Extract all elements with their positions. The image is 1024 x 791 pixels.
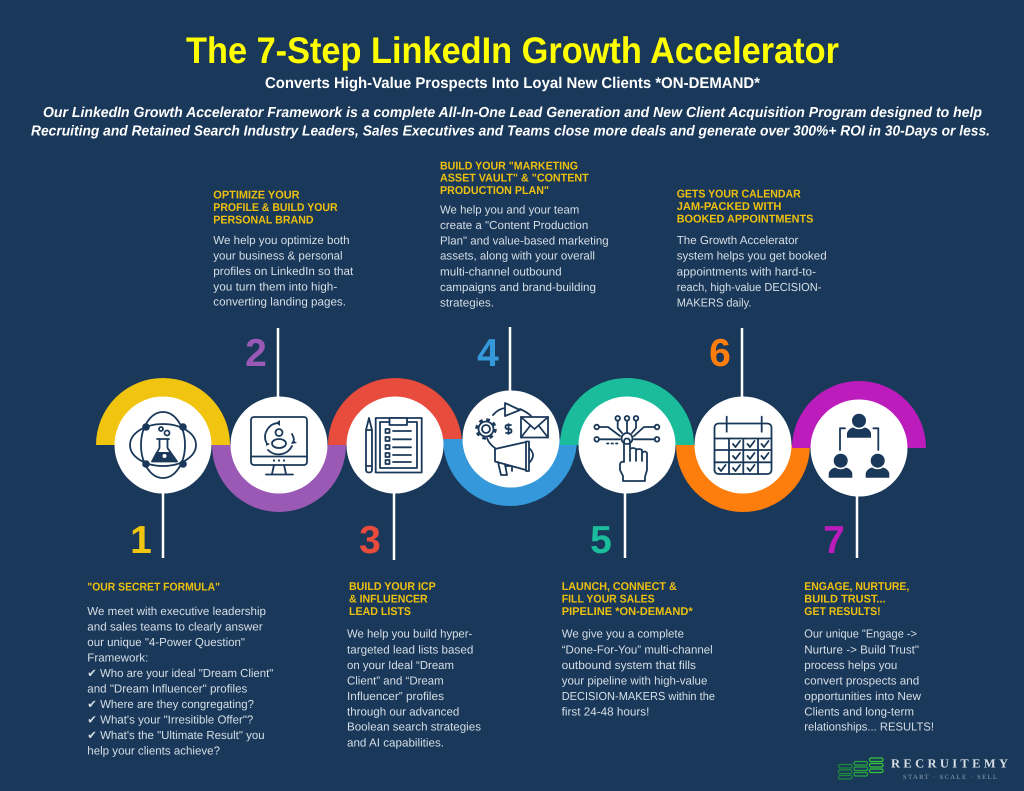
heading: step 6 — [677, 188, 814, 226]
panel: step 4 — [440, 160, 609, 309]
text: step 7: convert prospects and — [804, 674, 919, 687]
text: step 7: Our unique "Engage -> — [804, 628, 917, 641]
text: step 2: We help you optimize both — [213, 234, 350, 247]
text: step 7: process helps you — [804, 659, 897, 672]
panel: step 2 — [213, 189, 354, 309]
text: step 1: We meet with executive leadership — [87, 605, 266, 618]
logo wordmark: RECRUITEMY — [891, 756, 1008, 770]
step numbers: 5 — [590, 519, 612, 562]
heading: step 5: LAUNCH, CONNECT & — [562, 581, 677, 593]
text: step 4: strategies. — [440, 296, 494, 309]
heading: step 4: PRODUCTION PLAN" — [440, 185, 549, 197]
text: step 4: campaigns and brand-building — [440, 281, 596, 294]
text: step 6 — [677, 234, 827, 309]
text: step 1: help your clients achieve? — [87, 744, 221, 758]
step numbers: 7 — [823, 519, 845, 562]
text: step 4 — [440, 204, 609, 309]
text: step 5: your pipeline with high-value — [562, 674, 707, 687]
heading: step 6: JAM-PACKED WITH — [677, 201, 781, 213]
text: step 7 — [804, 628, 934, 734]
text: step 1: ✔ Where are they congregating? — [87, 698, 255, 711]
panel: step 1 — [87, 582, 273, 758]
text: step 2: your business & personal — [213, 249, 343, 262]
icon: marketing assets — [462, 390, 560, 488]
connector lines — [163, 327, 857, 560]
panel: step 6 — [677, 188, 827, 309]
text: step 1: our unique "4-Power Question" — [87, 636, 245, 649]
text: step 2: converting landing pages. — [213, 296, 346, 309]
step numbers: 4 — [477, 332, 499, 375]
icon: calendar — [694, 396, 792, 494]
text: step 1: Framework: — [87, 652, 148, 664]
text: step 1: ✔ Who are your ideal "Dream Client" — [87, 667, 273, 680]
text: step 6: appointments with hard-to- — [677, 265, 816, 278]
heading: step 3: BUILD YOUR ICP — [349, 581, 436, 593]
text: step 4: create a "Content Production — [440, 219, 588, 232]
text: step 1 — [87, 605, 273, 758]
heading: step 1: "OUR SECRET FORMULA" — [87, 582, 220, 594]
text: step 3: We help you build hyper- — [347, 628, 472, 641]
heading: step 2: OPTIMIZE YOUR — [213, 189, 300, 201]
text: step 6: MAKERS daily. — [677, 296, 751, 309]
text: step 6: The Growth Accelerator — [677, 234, 799, 247]
step numbers: 1 — [130, 519, 152, 562]
text: step 3: and AI capabilities. — [347, 736, 444, 749]
text: step 2 — [213, 234, 354, 309]
heading: step 7: ENGAGE, NURTURE, — [804, 581, 909, 593]
icon: touch network — [578, 396, 676, 494]
text: step 6: reach, high-value DECISION- — [677, 281, 822, 294]
heading: step 4: BUILD YOUR "MARKETING — [440, 160, 578, 172]
text: step 2: profiles on LinkedIn so that — [213, 265, 354, 278]
text: step 5: first 24-48 hours! — [562, 705, 649, 718]
text: step 5: DECISION-MAKERS within the — [562, 690, 715, 703]
text: step 3: Influencer” profiles — [347, 690, 444, 703]
text: step 4: multi-channel outbound — [440, 265, 562, 278]
text: step 7: Clients and long-term — [804, 705, 914, 718]
panel: step 7 — [804, 581, 934, 734]
step numbers: 6 — [709, 332, 731, 375]
heading: step 7: GET RESULTS! — [804, 606, 881, 618]
text: step 2: you turn them into high- — [213, 280, 337, 293]
heading: step 2: PERSONAL BRAND — [213, 214, 314, 226]
text: step 3: on your Ideal “Dream — [347, 659, 454, 672]
icon: atom and flask — [114, 396, 212, 494]
heading: step 4 — [440, 160, 589, 197]
heading: step 2: PROFILE & BUILD YOUR — [213, 202, 338, 214]
heading: step 5: FILL YOUR SALES — [562, 594, 655, 606]
logo tagline: START · SCALE · SELL — [903, 774, 997, 781]
subtitle: Converts High-Value Prospects Into Loyal New Clients *ON-DEMAND* — [265, 75, 761, 92]
text: step 3: targeted lead lists based — [347, 643, 473, 656]
text: step 4: We help you and your team — [440, 204, 579, 217]
text: step 1: and sales teams to clearly answer — [87, 620, 263, 634]
icon: monitor with profile — [230, 396, 328, 494]
text: step 5: “Done-For-You” multi-channel — [562, 643, 713, 656]
text: step 1: and "Dream Influencer" profiles — [87, 682, 247, 696]
heading: step 6: BOOKED APPOINTMENTS — [677, 214, 814, 226]
intro text: Recruiting and Retained Search Industry Leaders, Sales Executives and Teams close more deals and generate over 300%+ ROI in 30-Days or less. — [31, 124, 990, 140]
text: step 1: ✔ What's your "Irresitible Offer"? — [87, 714, 254, 726]
heading: step 3: & INFLUENCER — [349, 594, 428, 606]
text: step 3: Client” and “Dream — [347, 674, 444, 687]
step numbers — [130, 332, 845, 562]
heading: step 5 — [562, 581, 693, 618]
text: step 4: Plan" and value-based marketing — [440, 234, 609, 247]
icon: clipboard checklist — [346, 396, 444, 494]
timeline arcs — [96, 378, 926, 512]
text: step 4: assets, along with your overall — [440, 250, 595, 263]
heading: step 6: GETS YOUR CALENDAR — [677, 188, 801, 200]
heading: step 2 — [213, 189, 338, 226]
heading: step 3 — [349, 581, 436, 618]
text: step 1: ✔ What's the "Ultimate Result" you — [87, 729, 265, 742]
heading: step 5: PIPELINE *ON-DEMAND* — [562, 606, 693, 618]
text: step 7: relationships... RESULTS! — [804, 721, 934, 734]
text: step 5: We give you a complete — [562, 628, 684, 641]
text: step 7: Nurture -> Build Trust" — [804, 643, 919, 656]
intro text — [31, 105, 990, 140]
step numbers: 2 — [245, 332, 267, 375]
logo: Recruitemy — [838, 756, 1008, 781]
icon: logo bars — [838, 758, 883, 779]
text: step 3: Boolean search strategies — [347, 721, 481, 734]
text: step 3: through our advanced — [347, 705, 459, 718]
heading: step 7: BUILD TRUST... — [804, 594, 886, 606]
panel: step 3 — [347, 581, 481, 749]
text: step 3 — [347, 628, 481, 749]
intro text: Our LinkedIn Growth Accelerator Framework is a complete All-In-One Lead Generation and New Client Acquisition Program designed to help — [43, 105, 982, 121]
heading: step 3: LEAD LISTS — [349, 606, 411, 618]
icon: team hierarchy — [810, 400, 908, 496]
panel: step 5 — [562, 581, 715, 718]
step numbers: 3 — [359, 519, 381, 562]
heading: step 7 — [804, 581, 909, 618]
text: step 5 — [562, 628, 715, 718]
text: step 6: system helps you get booked — [677, 250, 827, 263]
text: step 5: outbound system that fills — [562, 659, 696, 672]
heading: step 4: ASSET VAULT" & "CONTENT — [440, 173, 589, 185]
text: step 7: opportunities into New — [804, 690, 922, 703]
title: The 7-Step LinkedIn Growth Accelerator — [186, 30, 839, 71]
